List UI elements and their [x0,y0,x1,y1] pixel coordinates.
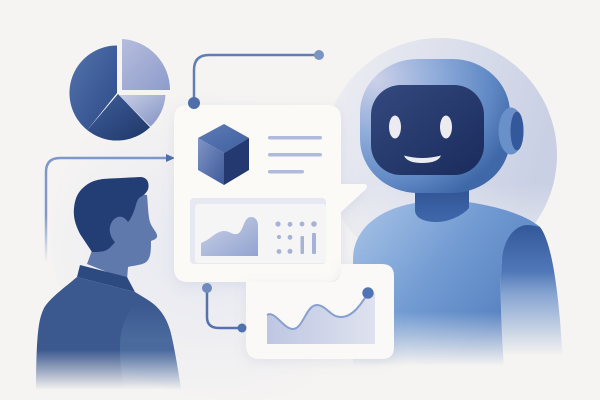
robot ear [498,108,524,154]
line chart area [267,293,375,344]
person collar [77,265,135,292]
cube icon [198,124,249,185]
robot smile [404,156,441,163]
robot body [353,202,540,370]
dashboard panel [190,198,326,264]
connector end dot [314,50,324,60]
pie slice: large left [69,45,117,130]
robot ear inner [510,112,524,150]
dashboard frame [190,198,326,264]
cube top face [198,124,249,153]
lower chart card [246,264,394,359]
line chart stroke [267,293,368,329]
infographic scene [36,38,562,389]
connector arrow: person to card [46,154,175,262]
robot right eye [440,116,452,138]
pie chart [69,39,170,141]
person hair [74,177,149,252]
robot neck [415,185,469,222]
person arm shading [120,322,180,381]
connector bottom dot [238,324,246,332]
pie slice: upper right [122,39,170,90]
robot [353,59,563,370]
arrow head [166,154,175,162]
person ear [110,217,128,242]
main card with speech tail [174,105,367,282]
line chart end dot [362,287,374,299]
pie slice: lower right [119,95,166,126]
dot grid [275,221,317,254]
connector: pie to card [194,50,324,103]
person torso [36,277,182,395]
dashboard inner [195,204,326,263]
person [36,177,182,395]
robot head [360,59,510,193]
robot face screen [371,85,484,175]
robot right arm [501,225,563,362]
background glow [50,70,430,400]
lower card body [246,264,394,359]
person neck and face [87,190,157,280]
connector top dot [202,283,212,293]
cube left face [198,138,224,185]
area chart small [201,217,258,256]
robot halo circle [334,38,557,234]
connector: card to lower chart [202,283,246,332]
text placeholder lines [268,136,322,174]
pie slice: bottom [87,94,150,141]
cube right face [224,138,249,185]
robot left eye [389,116,401,138]
connector start dot on card [188,97,200,109]
